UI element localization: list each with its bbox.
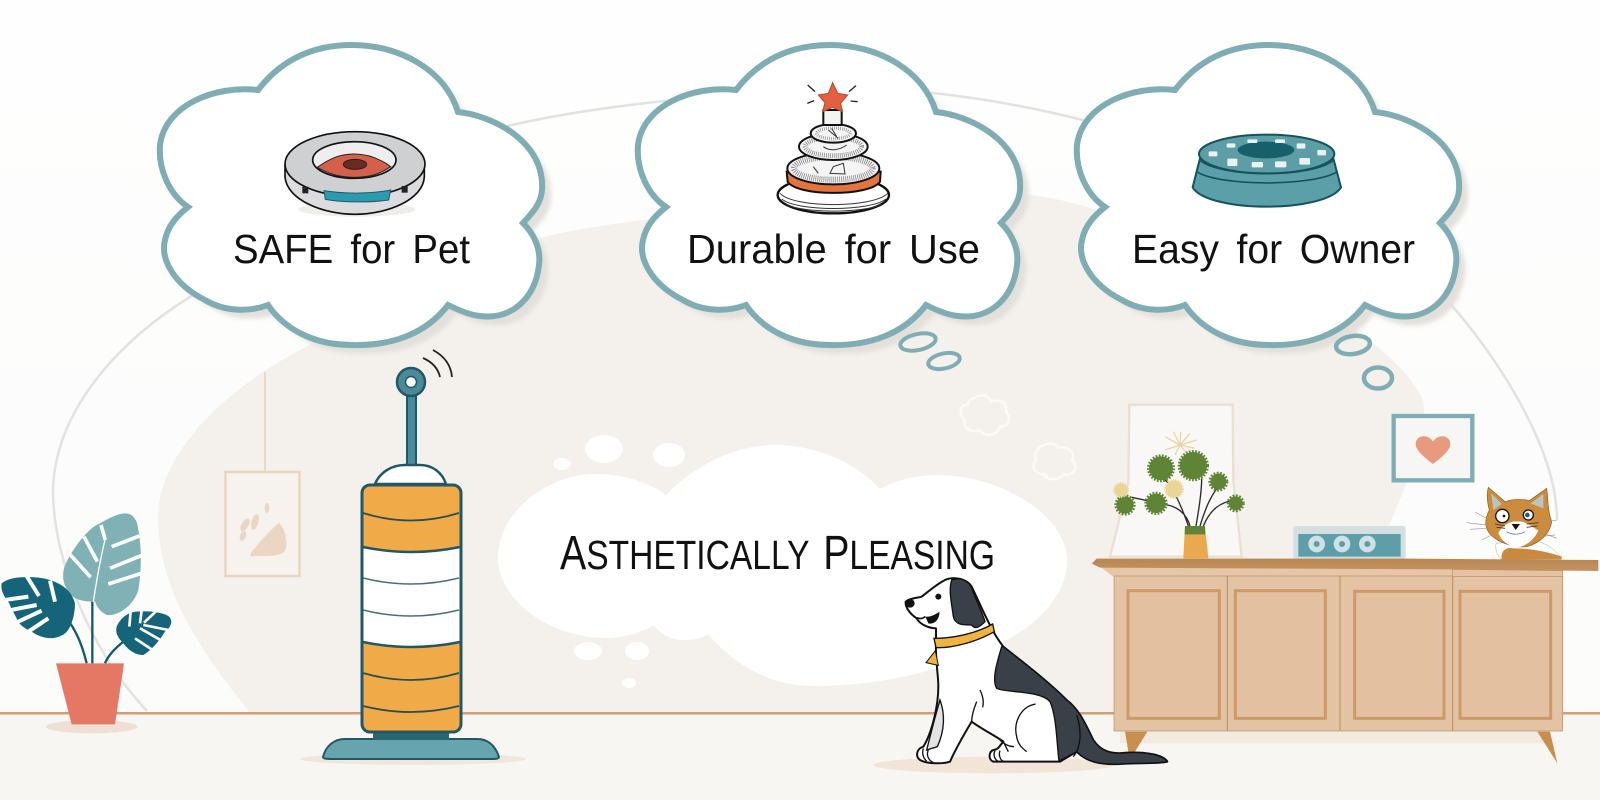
cabinet legs bbox=[1125, 732, 1557, 763]
label: Easy for Owner: Easy for Owner bbox=[1132, 226, 1415, 272]
wall art: paw print bbox=[226, 372, 300, 576]
heart frame bbox=[1394, 416, 1472, 480]
label: SAFE for Pet: SAFE for Pet bbox=[233, 226, 471, 272]
dog collar bbox=[926, 624, 994, 665]
panel: durable for use bbox=[638, 45, 1029, 372]
framed picture with plant bbox=[1110, 405, 1243, 558]
dog body bbox=[906, 578, 1167, 764]
panel: easy for owner bbox=[1077, 45, 1468, 388]
small device bbox=[1293, 526, 1406, 559]
illustration: sideboard cabinet bbox=[1092, 405, 1598, 763]
dog back patch and tail bbox=[995, 647, 1167, 764]
dog ear bbox=[950, 579, 985, 627]
heading: Asthetically Pleasing: ASTHETICALLY PLEASING bbox=[560, 527, 995, 580]
leaf: left dark bbox=[0, 576, 75, 638]
illustration: sitting dog bbox=[873, 578, 1167, 773]
leaf: right dark bbox=[116, 610, 171, 655]
leaf: light bbox=[63, 513, 143, 615]
cabinet top bbox=[1100, 567, 1453, 577]
icon: tiered cake toy bbox=[778, 83, 889, 213]
cat bbox=[1467, 487, 1562, 559]
decorative flower outlines bbox=[961, 395, 1075, 479]
cabinet body bbox=[1114, 569, 1563, 731]
icon: teal bowl bbox=[1193, 135, 1341, 207]
illustration: robot vacuum tower bbox=[300, 350, 526, 765]
panel: safe for pet bbox=[160, 45, 551, 354]
callout: Asthetically Pleasing cloud bbox=[498, 435, 1067, 688]
label: Durable for Use: Durable for Use bbox=[687, 226, 980, 272]
thought bubbles: easy bbox=[1335, 334, 1392, 388]
thought bubbles: durable bbox=[899, 330, 961, 372]
icon: robot puck bbox=[285, 132, 425, 217]
illustration: potted plant bbox=[0, 513, 171, 733]
